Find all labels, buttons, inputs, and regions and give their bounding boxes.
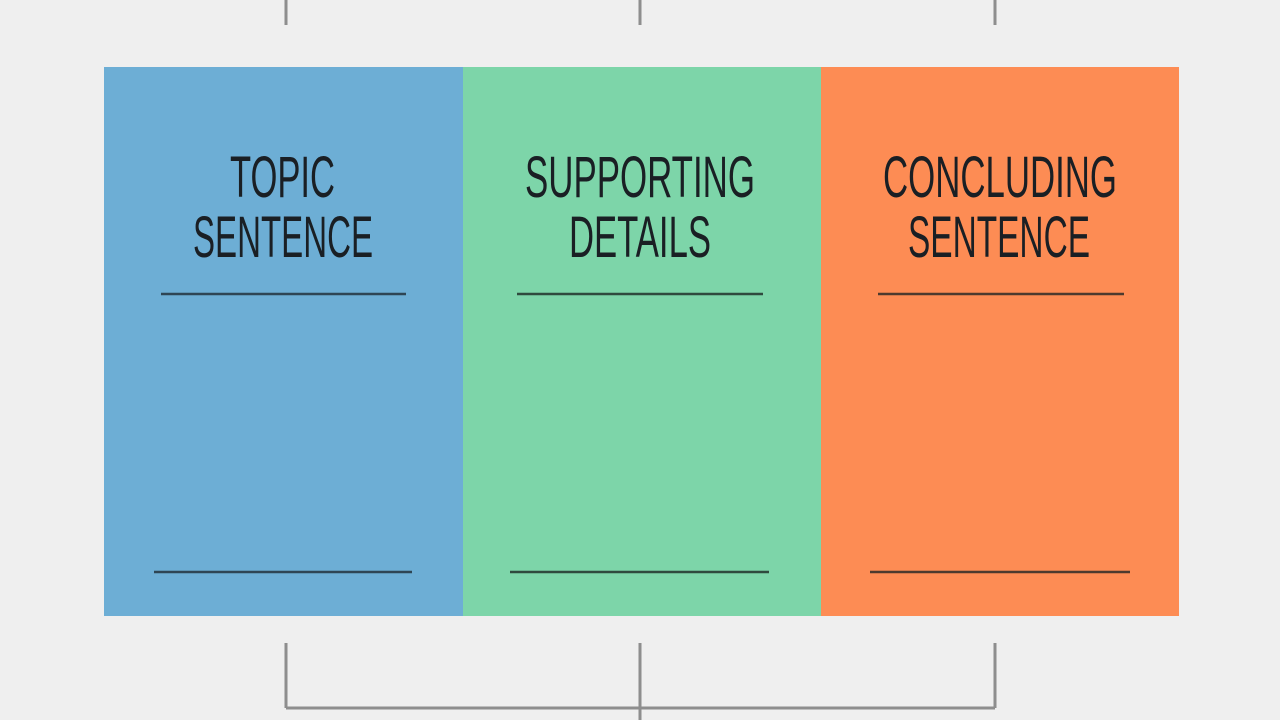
heading: topic sentence: SENTENCE: [193, 205, 373, 270]
heading: supporting details: [525, 145, 755, 270]
top connector lines: [286, 0, 995, 25]
heading: topic sentence: [193, 145, 373, 270]
heading: supporting details: SUPPORTING: [525, 145, 755, 210]
panel: concluding sentence: [821, 67, 1179, 616]
panel: supporting details: [463, 67, 821, 616]
heading: concluding sentence: SENTENCE: [908, 205, 1090, 270]
heading: topic sentence: TOPIC: [230, 145, 335, 210]
bottom bracket connector: [286, 643, 995, 720]
heading: supporting details: DETAILS: [569, 205, 711, 270]
heading: concluding sentence: CONCLUDING: [883, 145, 1117, 210]
panel: topic sentence: [104, 67, 464, 616]
heading: concluding sentence: [883, 145, 1117, 270]
